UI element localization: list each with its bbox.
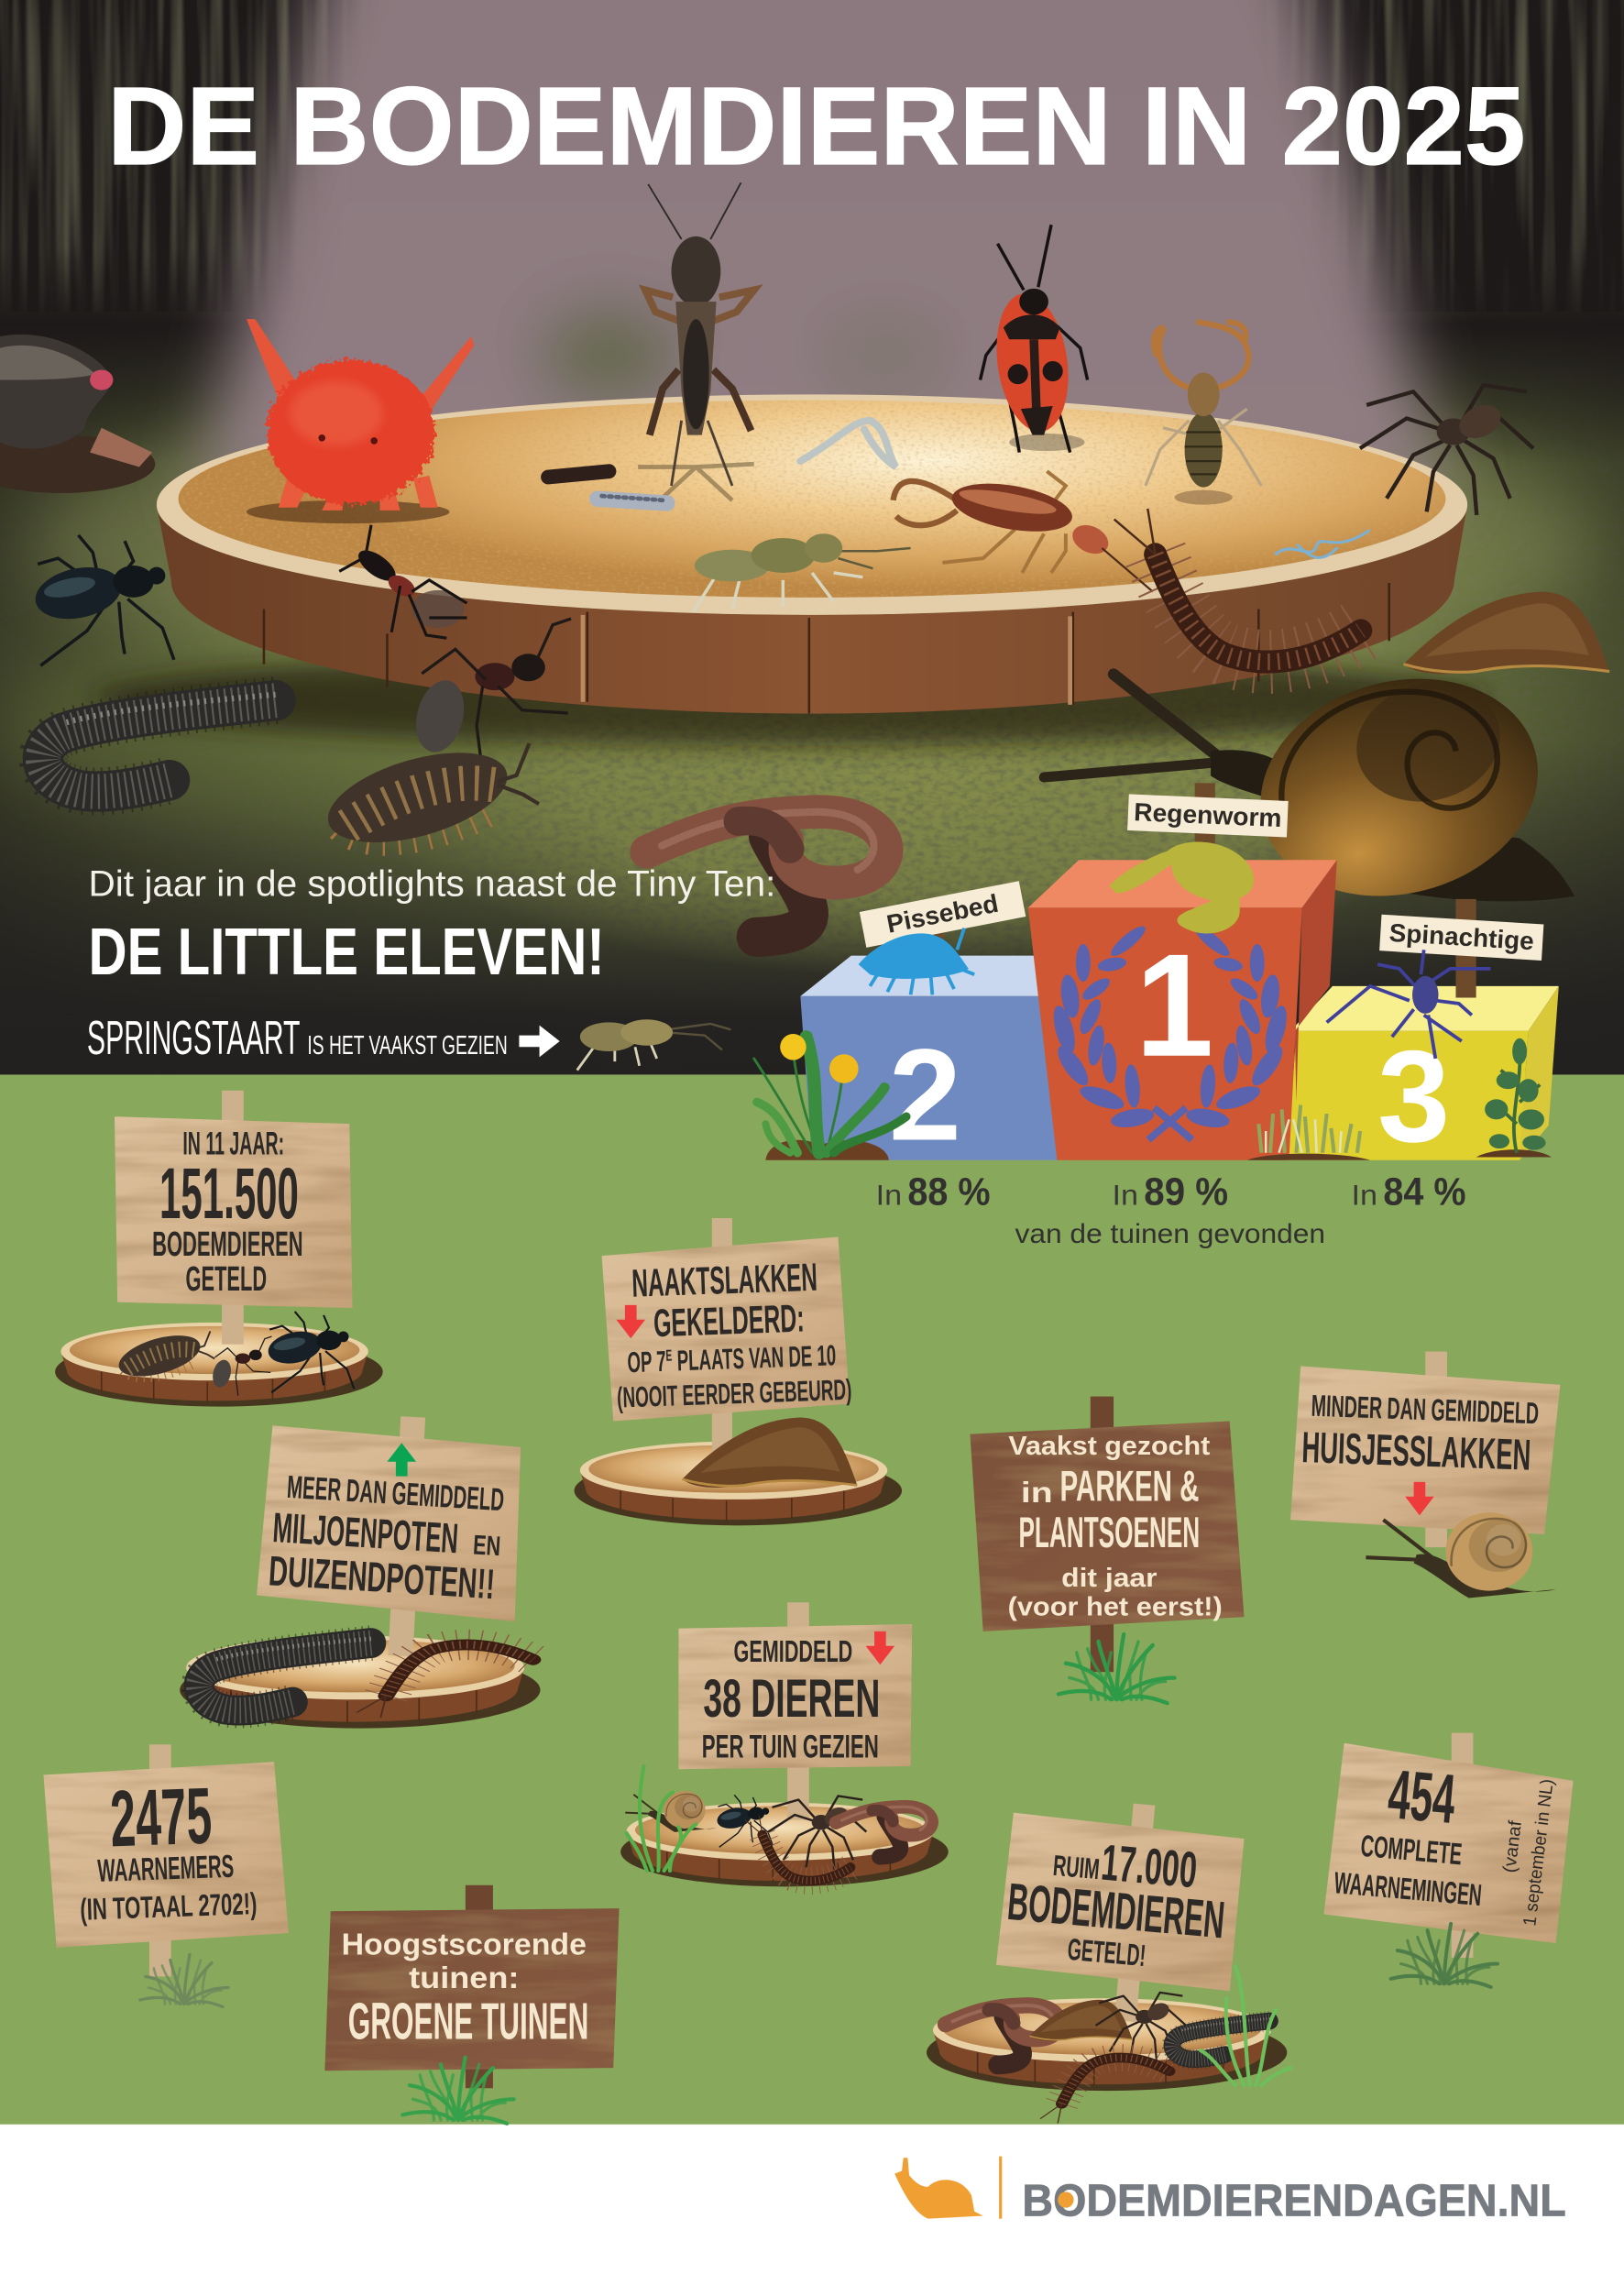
sign: vaakst gezocht in parken en plantsoenen: Vaakst gezocht <box>1008 1432 1211 1461</box>
label: Pissebed: Pissebed <box>884 889 1001 939</box>
icon: green up arrow <box>387 1443 416 1477</box>
label: Pissebed <box>860 881 1026 948</box>
divider <box>999 2157 1002 2219</box>
sign: miljoenpoten en duizendpoten <box>180 1416 541 1729</box>
animal: parasitic wasp <box>339 525 466 638</box>
sign: hoogstscorende tuinen <box>324 1885 620 2124</box>
sign: vaakst gezocht in parken en plantsoenen: (voor het eerst!) <box>1008 1592 1223 1621</box>
animal: slug <box>1404 592 1609 674</box>
animal: mole cricket <box>638 182 754 500</box>
sign: naaktslakken gekelderd: (NOOIT EERDER GEBEURD) <box>617 1373 852 1414</box>
label: Spinachtige: Spinachtige <box>1388 918 1535 955</box>
sign: 151.500 bodemdieren: IN 11 JAAR: <box>182 1126 284 1161</box>
post: Spinachtige label <box>1455 899 1476 998</box>
animal: pseudoscorpion <box>1146 322 1261 505</box>
animal: big garden snail <box>1044 649 1575 926</box>
podium <box>754 783 1559 1170</box>
plant: parsley herb <box>1476 1038 1552 1158</box>
intro text: Tiny Ten: Dit jaar in de spotlights naast de Tiny Ten: <box>89 864 775 905</box>
hero scene: night garden with spotlit stage <box>0 0 1624 1074</box>
sign: miljoenpoten en duizendpoten: EN <box>472 1530 501 1562</box>
sign: vaakst gezocht in parken en plantsoenen <box>970 1397 1244 1703</box>
sign: 454 complete waarnemingen: 454 <box>1385 1755 1458 1839</box>
wordmark: BODEMDIERENDAGEN.NL <box>1022 2176 1566 2225</box>
sign: 2475 waarnemers <box>43 1744 289 2007</box>
round arena stage <box>157 394 1467 714</box>
sign: ruim 17.000 bodemdieren geteld: GETELD! <box>1066 1933 1147 1973</box>
animal: woodlouse <box>318 735 539 860</box>
animal: ant <box>409 619 571 774</box>
sign: 2475 waarnemers: 2475 <box>109 1772 214 1863</box>
sign: vaakst gezocht in parken en plantsoenen: PARKEN & <box>1060 1463 1199 1511</box>
note: vanaf 1 september: 1 september in NL) <box>1520 1778 1558 1928</box>
springstaart callout: IS HET VAAKST GEZIEN <box>307 1031 508 1060</box>
animal: centipede <box>1114 509 1361 662</box>
sign: naaktslakken gekelderd: OP 7 <box>627 1344 694 1379</box>
post: Pissebed label <box>927 906 944 964</box>
sign: hoogstscorende tuinen: Hoogstscorende <box>342 1928 587 1962</box>
sign: miljoenpoten en duizendpoten: MEER DAN GEMIDDELD <box>286 1469 505 1518</box>
value: Regenworm 89%: 89 % <box>1144 1170 1228 1214</box>
value: Spinachtige 84% <box>1352 1170 1466 1214</box>
sign: gemiddeld 38 dieren: 38 DIEREN <box>703 1669 880 1729</box>
value: Spinachtige 84%: In <box>1352 1179 1377 1212</box>
label: Regenworm: Regenworm <box>1134 797 1282 832</box>
podium step 2 <box>800 956 1066 1169</box>
sign: 454 complete waarnemingen <box>1323 1733 1574 1987</box>
animal: fire bug <box>981 225 1088 453</box>
post: Regenworm label <box>1195 783 1215 870</box>
icon: red down arrow <box>866 1631 894 1664</box>
note: vanaf 1 september: (vanaf <box>1499 1819 1526 1874</box>
value: Pissebed 88%: In <box>876 1179 902 1212</box>
spotlight haze <box>196 0 1450 500</box>
animal: springtail on stage <box>693 533 911 612</box>
springstaart callout: SPRINGSTAART <box>87 1012 301 1065</box>
value: Regenworm 89% <box>1113 1170 1228 1214</box>
value: Spinachtige 84%: 84 % <box>1383 1170 1466 1214</box>
value: Pissebed 88%: 88 % <box>907 1170 991 1214</box>
icon: red down arrow <box>1405 1482 1434 1515</box>
sign: gemiddeld 38 dieren: GEMIDDELD <box>734 1635 852 1669</box>
animal: millipede <box>43 695 276 792</box>
sign: naaktslakken gekelderd: PLAATS VAN DE 10 <box>672 1338 837 1378</box>
animal: ground beetle <box>30 535 174 665</box>
sign: naaktslakken gekelderd <box>575 1218 902 1525</box>
podium step 1 <box>1028 860 1337 1160</box>
sign: gemiddeld 38 dieren <box>620 1602 949 1886</box>
background: green lower field <box>0 1074 1624 2125</box>
sign: 151.500 bodemdieren: 151.500 <box>159 1152 299 1234</box>
sign: gemiddeld 38 dieren: PER TUIN GEZIEN <box>702 1730 879 1765</box>
sign: 2475 waarnemers: (IN TOTAAL 2702!) <box>80 1887 258 1928</box>
sign: hoogstscorende tuinen: tuinen: <box>409 1961 519 1995</box>
sign: vaakst gezocht in parken en plantsoenen: PLANTSOENEN <box>1018 1509 1200 1557</box>
note: vanaf 1 september <box>1499 1778 1558 1928</box>
animal: earwig <box>894 471 1153 592</box>
value: Regenworm 89%: In <box>1113 1179 1138 1212</box>
sign: hoogstscorende tuinen: GROENE TUINEN <box>348 1992 588 2050</box>
laurel wreath <box>1049 922 1290 1140</box>
animal: red velvet mite <box>247 319 474 523</box>
animal: small larvae and worms on stage <box>548 421 1369 557</box>
value: Pissebed 88% <box>876 1170 991 1214</box>
animal: mole <box>0 335 155 493</box>
sign: 151.500 bodemdieren: GETELD <box>186 1260 267 1299</box>
animal: springtail <box>577 1019 730 1071</box>
caption: van de tuinen gevonden <box>1015 1219 1325 1249</box>
sign: miljoenpoten en duizendpoten: MILJOENPOTEN <box>271 1503 460 1562</box>
sign: minder huisjesslakken <box>1290 1352 1560 1598</box>
number 2: 2 <box>889 1023 961 1169</box>
sign: 2475 waarnemers: WAARNEMERS <box>97 1849 235 1889</box>
sign: naaktslakken gekelderd: GEKELDERD: <box>653 1297 805 1346</box>
animal: earthworm <box>647 812 886 937</box>
footer logo <box>894 2157 1566 2225</box>
icon: white arrow <box>519 1026 560 1057</box>
icon: spider silhouette <box>1327 950 1490 1059</box>
sign: 454 complete waarnemingen: WAARNEMINGEN <box>1333 1866 1483 1913</box>
plant: grass clump <box>1247 1105 1370 1160</box>
percentages <box>876 1170 1466 1249</box>
sign: naaktslakken gekelderd: NAAKTSLAKKEN <box>631 1256 818 1306</box>
sign: ruim 17.000 bodemdieren geteld: 17.000 <box>1099 1834 1200 1898</box>
sign: vaakst gezocht in parken en plantsoenen: dit jaar <box>1061 1564 1158 1593</box>
icon: red down arrow <box>616 1305 645 1338</box>
sign: ruim 17.000 bodemdieren geteld <box>927 1804 1290 2124</box>
sign: 454 complete waarnemingen: COMPLETE <box>1359 1829 1464 1872</box>
number 1: 1 <box>1136 923 1213 1087</box>
plant: dandelions <box>754 1034 906 1160</box>
springstaart callout <box>87 1012 730 1071</box>
icon: woodlouse silhouette <box>859 928 974 994</box>
sign: 151.500 bodemdieren: BODEMDIEREN <box>152 1225 303 1264</box>
animal: house spider on the grass <box>1360 385 1533 515</box>
icon: orange snail <box>894 2158 983 2219</box>
sign: vaakst gezocht in parken en plantsoenen: in <box>1021 1476 1053 1509</box>
title: DE BODEMDIEREN IN 2025 <box>107 65 1525 188</box>
sign: miljoenpoten en duizendpoten: DUIZENDPOTEN!! <box>268 1546 496 1608</box>
podium step 3 <box>1288 986 1559 1170</box>
sign: 151.500 bodemdieren <box>55 1091 383 1407</box>
sign: naaktslakken gekelderd: E <box>665 1346 673 1365</box>
heading: De Little Eleven: DE LITTLE ELEVEN! <box>89 915 605 989</box>
number 3: 3 <box>1377 1024 1450 1170</box>
sign: ruim 17.000 bodemdieren geteld: BODEMDIEREN <box>1005 1873 1227 1950</box>
icon: earthworm silhouette <box>1109 842 1254 934</box>
sign: ruim 17.000 bodemdieren geteld: RUIM <box>1052 1849 1101 1885</box>
background: white footer band <box>0 2125 1624 2274</box>
logo accent dot <box>1058 2192 1074 2208</box>
